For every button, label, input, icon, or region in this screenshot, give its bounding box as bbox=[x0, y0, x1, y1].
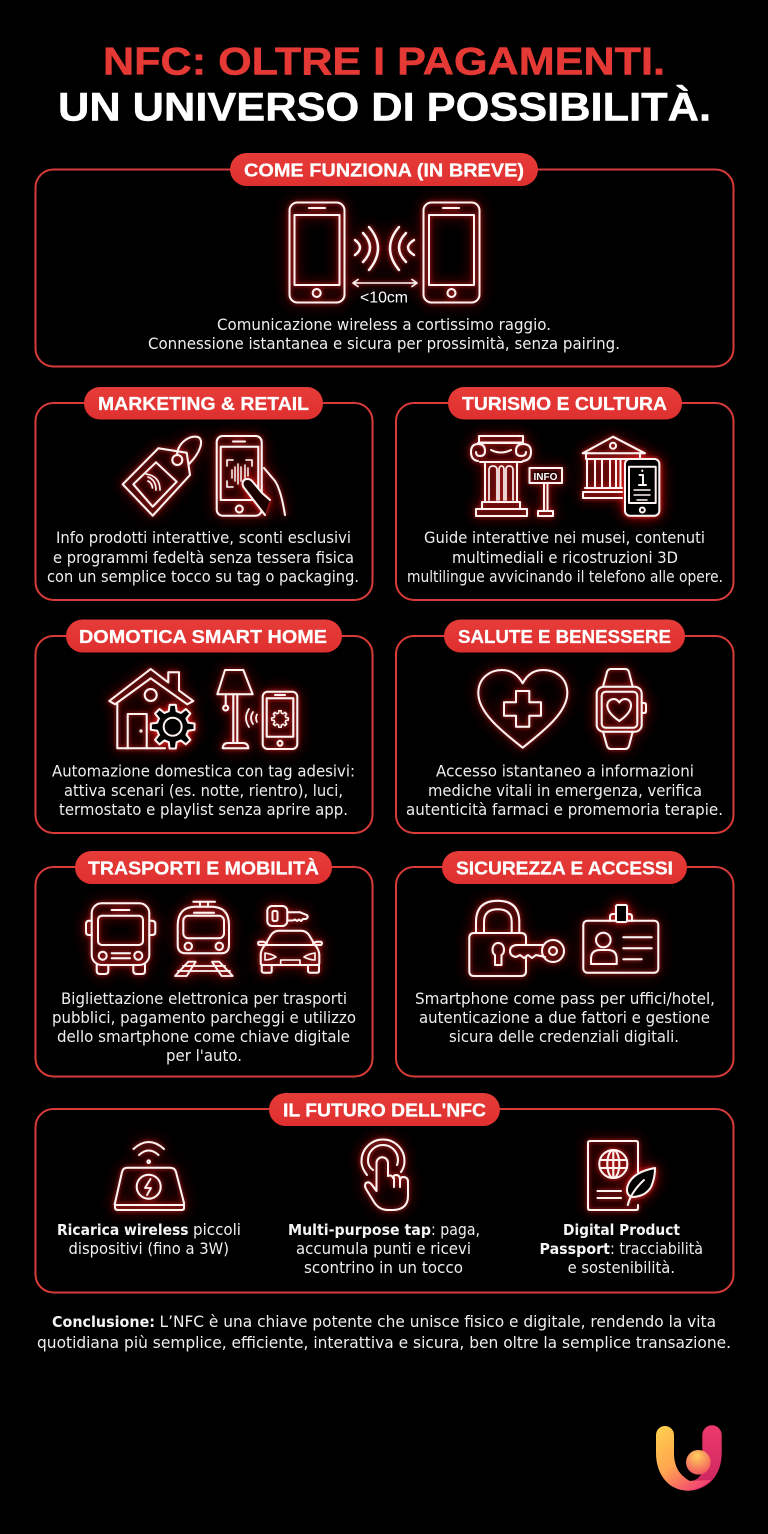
panel: turismo e cultura bbox=[396, 387, 734, 600]
text: digital product passport: Passport bbox=[540, 1240, 611, 1258]
title: UN UNIVERSO DI POSSIBILITÀ. bbox=[58, 84, 711, 130]
panel: come funziona bbox=[36, 153, 734, 366]
text: digital product passport: : tracciabilità bbox=[610, 1239, 703, 1258]
heading: salute bbox=[444, 620, 685, 652]
description: marketing: con un semplice tocco su tag o packaging. bbox=[47, 567, 359, 586]
logo bbox=[656, 1425, 722, 1491]
description: domotica: termostato e playlist senza aprire app. bbox=[59, 800, 348, 819]
icon: house with gear bbox=[109, 669, 194, 748]
text: multi-purpose tap: scontrino in un tocco bbox=[304, 1258, 463, 1277]
panel: sicurezza bbox=[396, 851, 734, 1076]
heading: salute: SALUTE E BENESSERE bbox=[458, 626, 671, 647]
icon: tram bbox=[175, 902, 233, 976]
description: domotica: Automazione domestica con tag adesivi: bbox=[52, 762, 355, 780]
description: trasporti bbox=[52, 989, 356, 1065]
heading: domotica: DOMOTICA SMART HOME bbox=[79, 626, 327, 647]
conclusion: Conclusione: bbox=[52, 1313, 155, 1331]
conclusion: quotidiana più semplice, efficiente, interattiva e sicura, ben oltre la semplice transazione. bbox=[37, 1333, 731, 1352]
description: salute: Accesso istantaneo a informazioni bbox=[436, 762, 694, 780]
heading: turismo: TURISMO E CULTURA bbox=[462, 393, 667, 414]
description: salute bbox=[406, 762, 723, 819]
description: domotica bbox=[52, 762, 355, 819]
sign text: INFO bbox=[534, 471, 558, 483]
heading: turismo bbox=[448, 387, 682, 420]
panel: trasporti bbox=[36, 851, 372, 1076]
description: salute: autenticità farmaci e promemoria terapie. bbox=[406, 800, 723, 819]
icon: wireless charger bbox=[115, 1142, 184, 1210]
panel: domotica bbox=[36, 620, 372, 833]
description: marketing bbox=[47, 528, 359, 586]
icon: car and key bbox=[258, 906, 322, 973]
title bbox=[58, 40, 711, 130]
icon: phone with hand bbox=[217, 436, 285, 516]
description: marketing: e programmi fedeltà senza tessera fisica bbox=[53, 548, 354, 567]
text: ricarica wireless: piccoli bbox=[193, 1220, 241, 1239]
heading: trasporti: TRASPORTI E MOBILITÀ bbox=[88, 858, 319, 878]
description: turismo: multimediali e ricostruzioni 3D bbox=[452, 548, 678, 567]
description: domotica: attiva scenari (es. notte, rientro), luci, bbox=[64, 781, 343, 800]
heading: come funziona: COME FUNZIONA (IN BREVE) bbox=[244, 160, 524, 180]
description: marketing: Info prodotti interattive, sconti esclusivi bbox=[56, 528, 351, 547]
description: come funziona: Connessione istantanea e sicura per prossimità, senza pairing. bbox=[148, 334, 620, 353]
text: ricarica wireless: Ricarica wireless bbox=[57, 1221, 188, 1239]
heading: sicurezza bbox=[442, 851, 687, 884]
description: turismo bbox=[407, 528, 723, 586]
icon: museum and info phone bbox=[583, 437, 659, 516]
description: turismo: multilingue avvicinando il telefono alle opere. bbox=[407, 567, 723, 586]
heading: trasporti bbox=[75, 851, 332, 884]
icon: smartwatch bbox=[597, 669, 646, 749]
panel: marketing e retail bbox=[36, 387, 372, 600]
description: trasporti: Bigliettazione elettronica per trasporti bbox=[61, 989, 347, 1008]
text: digital product passport: Digital Product bbox=[563, 1221, 681, 1239]
text: ricarica wireless bbox=[57, 1220, 241, 1258]
description: come funziona bbox=[148, 315, 620, 353]
panel: salute bbox=[396, 620, 734, 833]
text: digital product passport bbox=[540, 1221, 703, 1277]
description: trasporti: dello smartphone come chiave digitale bbox=[57, 1027, 350, 1046]
text: digital product passport: e sostenibilità. bbox=[568, 1258, 675, 1277]
description: sicurezza bbox=[415, 989, 715, 1046]
text: multi-purpose tap bbox=[288, 1220, 480, 1277]
heading: sicurezza: SICUREZZA E ACCESSI bbox=[456, 858, 673, 878]
icon: lamp and phone bbox=[217, 670, 297, 749]
description: turismo: Guide interattive nei musei, contenuti bbox=[424, 528, 705, 547]
text: ricarica wireless: dispositivi (fino a 3W) bbox=[68, 1239, 229, 1258]
icon: id badge bbox=[583, 905, 658, 973]
heading: come funziona bbox=[230, 153, 538, 186]
description: sicurezza: Smartphone come pass per uffici/hotel, bbox=[415, 989, 715, 1008]
text: multi-purpose tap: accumula punti e ricevi bbox=[296, 1239, 471, 1258]
heading: futuro: IL FUTURO DELL'NFC bbox=[283, 1100, 486, 1120]
conclusion bbox=[37, 1312, 731, 1352]
description: sicurezza: autenticazione a due fattori e gestione bbox=[419, 1008, 710, 1027]
heading: domotica bbox=[66, 620, 342, 652]
description: trasporti: per l'auto. bbox=[166, 1046, 242, 1065]
heading: futuro bbox=[269, 1093, 500, 1126]
icon: digital passport with leaf bbox=[588, 1141, 655, 1210]
title: NFC: OLTRE I PAGAMENTI. bbox=[103, 40, 665, 84]
panel: il futuro dell'nfc bbox=[36, 1093, 734, 1292]
description: sicurezza: sicura delle credenziali digitali. bbox=[449, 1027, 679, 1046]
icon: bus bbox=[86, 903, 155, 974]
text: multi-purpose tap: Multi-purpose tap bbox=[288, 1221, 431, 1239]
icon: two phones with waves bbox=[290, 202, 480, 302]
icon: column and info sign bbox=[471, 436, 562, 516]
description: come funziona: Comunicazione wireless a cortissimo raggio. bbox=[217, 315, 551, 334]
heading: marketing: MARKETING & RETAIL bbox=[98, 393, 309, 414]
description: salute: mediche vitali in emergenza, verifica bbox=[428, 781, 702, 800]
description: trasporti: pubblici, pagamento parcheggi e utilizzo bbox=[52, 1008, 356, 1027]
conclusion: L’NFC è una chiave potente che unisce fisico e digitale, rendendo la vita bbox=[160, 1312, 716, 1331]
icon: tap finger bbox=[361, 1140, 408, 1210]
icon: nfc tag bbox=[123, 437, 201, 516]
icon: padlock and key bbox=[469, 901, 564, 976]
heading: marketing bbox=[84, 387, 323, 420]
distance label: <10cm bbox=[360, 290, 408, 306]
text: multi-purpose tap: : paga, bbox=[431, 1220, 480, 1239]
icon: heart with cross bbox=[478, 670, 567, 748]
